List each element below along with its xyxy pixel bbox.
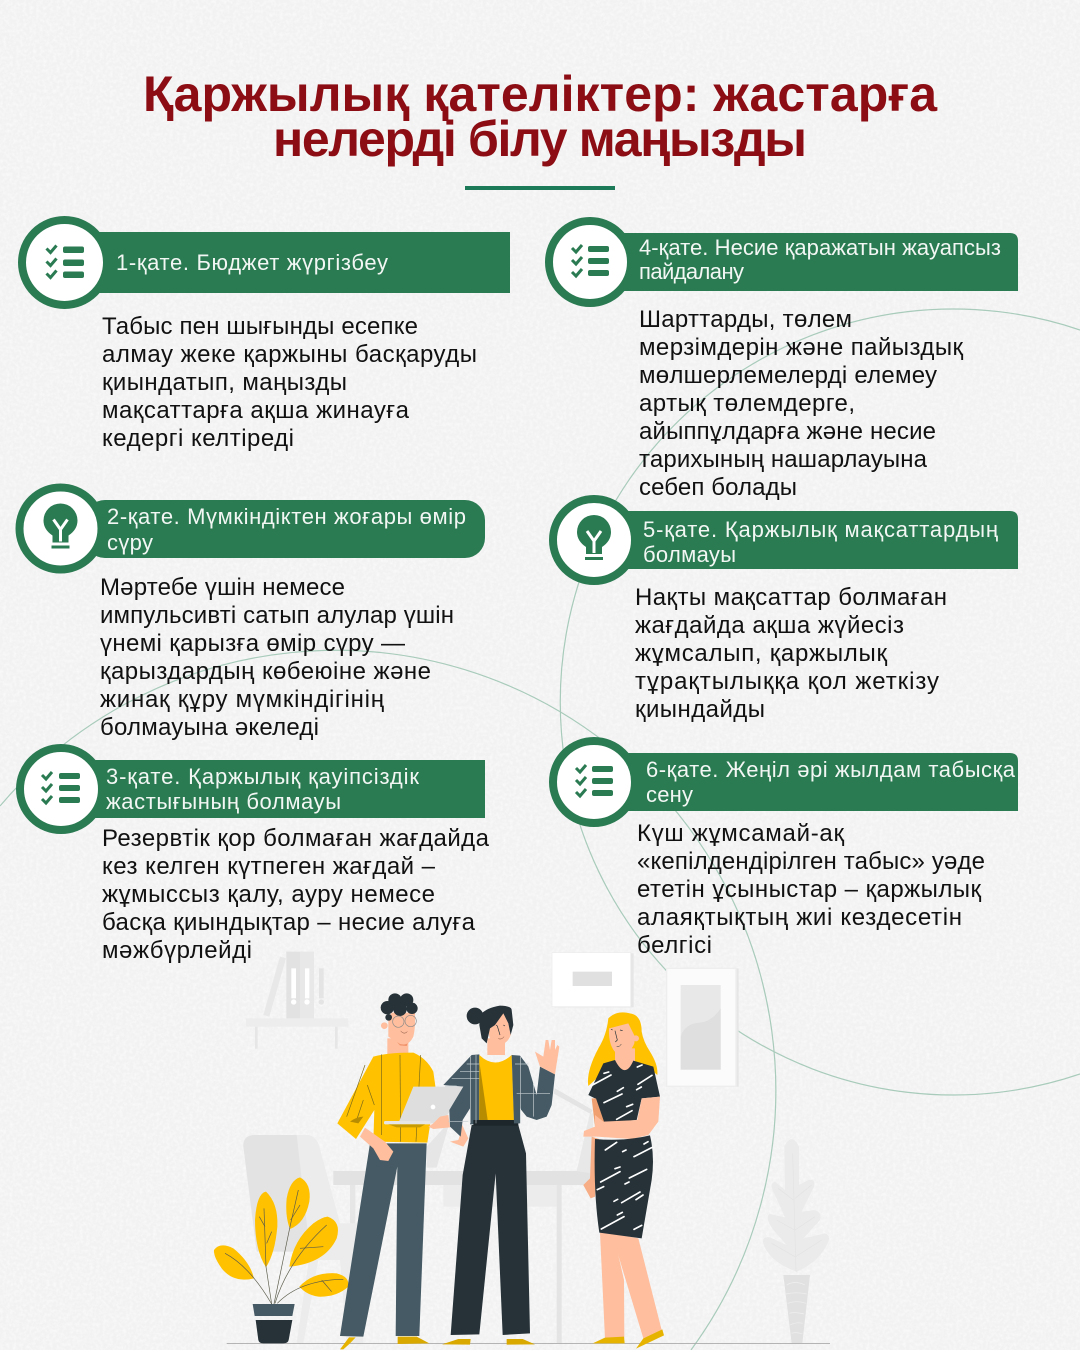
- body text 1: [102, 313, 477, 452]
- banner 4: [610, 233, 1018, 291]
- body text 3: Резервтік қор болмаған жағдайда: [102, 825, 490, 852]
- ground line: [227, 1342, 830, 1345]
- body text 1: алмау жеке қаржыны басқаруды: [102, 341, 477, 368]
- body text 6: ететін ұсыныстар – қаржылық: [637, 876, 982, 903]
- title: [143, 66, 938, 167]
- body text 4: артық төлемдерге,: [639, 390, 855, 417]
- body text 2: қарыздардың көбеюіне және: [100, 658, 431, 685]
- body text 3: [102, 825, 490, 964]
- woman in patterned dress: [583, 1012, 664, 1349]
- panel: mistake 3: [20, 748, 490, 964]
- body text 6: алаяқтықтың жиі кездесетін: [637, 904, 962, 931]
- body text 6: «кепілдендірілген табыс» уәде: [637, 848, 985, 875]
- body text 1: мақсаттарға ақша жинауға: [102, 397, 410, 424]
- body text 6: Күш жұмсамай-ақ: [637, 820, 844, 847]
- body text 2: Мәртебе үшін немесе: [100, 574, 345, 601]
- potted plant: [214, 1177, 349, 1343]
- body text 2: болмауына әкеледі: [100, 714, 319, 741]
- banner 2: сүру: [107, 530, 153, 555]
- icon: checklist in circle: [549, 221, 631, 303]
- panel: mistake 6: [553, 741, 1018, 959]
- body text 3: кез келген күтпеген жағдай –: [102, 853, 436, 880]
- panel: mistake 5: [553, 499, 1018, 723]
- body text 2: [100, 574, 454, 741]
- title: Қаржылық қателіктер: жастарға: [143, 66, 938, 122]
- body text 4: мөлшерлемелерді елемеу: [639, 362, 937, 389]
- body text 4: тарихының нашарлауына: [639, 446, 928, 473]
- body text 5: [635, 584, 947, 723]
- wall frame: tall picture: [667, 968, 739, 1087]
- body text 1: Табыс пен шығынды есепке: [102, 313, 418, 340]
- icon: light bulb in circle: [20, 488, 102, 570]
- banner 3: жастығының болмауы: [106, 789, 341, 814]
- body text 2: импульсивті сатып алулар үшін: [100, 602, 454, 629]
- icon: checklist in circle: [22, 220, 107, 305]
- body text 1: кедергі келтіреді: [102, 425, 294, 452]
- panel: mistake 1: [22, 220, 510, 452]
- banner 6: сену: [646, 782, 693, 807]
- banner 5: [615, 511, 1018, 569]
- body text 4: айыппұлдарға және несие: [639, 418, 936, 445]
- body text 1: қиындатып, маңызды: [102, 369, 347, 396]
- body text 5: тұрақтылыққа қол жеткізу: [635, 668, 939, 695]
- body text 5: қиындайды: [635, 696, 765, 723]
- body text 3: жұмыссыз қалу, ауру немесе: [102, 881, 435, 908]
- banner 4: пайдалану: [639, 259, 744, 284]
- body text 4: мерзімдерін және пайыздық: [639, 334, 964, 361]
- body text 2: жинақ құру мүмкіндігінің: [100, 686, 385, 713]
- body text 4: Шарттарды, төлем: [639, 306, 852, 333]
- panel: mistake 2: [20, 488, 485, 741]
- man with laptop: [337, 993, 463, 1349]
- body text 2: үнемі қарызға өмір сүру —: [100, 630, 405, 657]
- background plant: [763, 1139, 829, 1343]
- banner 2: 2-қате. Мүмкіндіктен жоғары өмір: [107, 504, 466, 529]
- woman in cardigan: [442, 1006, 559, 1345]
- banner 2: [85, 500, 485, 558]
- banner 1: 1-қате. Бюджет жүргізбеу: [116, 250, 388, 275]
- wall frame: small white card: [552, 953, 634, 1007]
- icon: checklist in circle: [553, 741, 635, 823]
- body text 6: [637, 820, 985, 959]
- icon: checklist in circle: [20, 748, 102, 830]
- body text 5: Нақты мақсаттар болмаған: [635, 584, 947, 611]
- body text 6: белгісі: [637, 932, 712, 959]
- body text 5: жағдайда ақша жүйесіз: [635, 612, 904, 639]
- body text 5: жұмсалып, қаржылық: [635, 640, 888, 667]
- banner 3: [85, 760, 485, 818]
- body text 4: себеп болады: [639, 474, 797, 501]
- banner 5: 5-қате. Қаржылық мақсаттардың: [643, 517, 998, 542]
- panel: mistake 4: [549, 221, 1018, 501]
- banner 1: [90, 232, 510, 293]
- banner 6: [615, 753, 1018, 811]
- banner 3: 3-қате. Қаржылық қауіпсіздік: [106, 764, 419, 789]
- banner 5: болмауы: [643, 542, 736, 567]
- illustration background: shelf, chair, table, frames, plant: [243, 952, 829, 1343]
- banner 4: 4-қате. Несие қаражатын жауапсыз: [639, 235, 1001, 260]
- icon: light bulb in circle: [553, 499, 635, 581]
- body text 3: мәжбүрлейді: [102, 937, 252, 964]
- illustration: team of three people in an office: [214, 952, 830, 1349]
- body text 3: басқа қиындықтар – несие алуға: [102, 909, 476, 936]
- banner 6: 6-қате. Жеңіл әрі жылдам табысқа: [646, 757, 1016, 782]
- title: нелерді білу маңызды: [273, 111, 807, 167]
- body text 4: [639, 306, 964, 501]
